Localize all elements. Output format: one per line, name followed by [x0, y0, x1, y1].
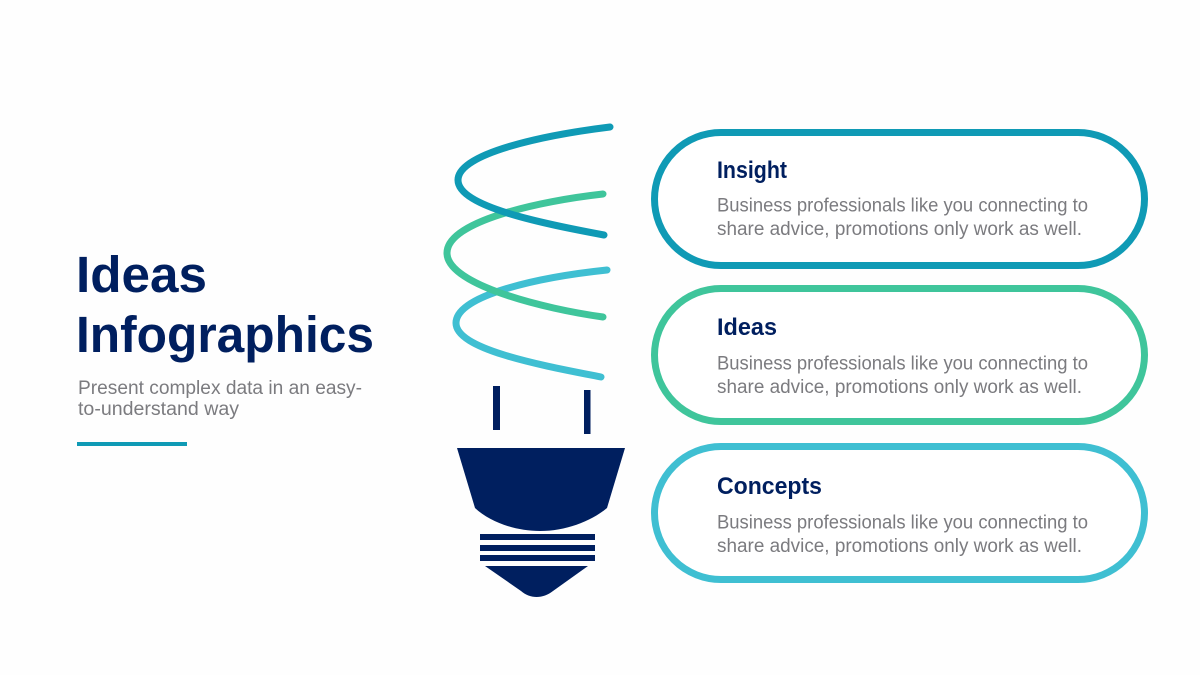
plug body	[457, 448, 625, 531]
subtitle: to-understand way	[78, 399, 240, 420]
pill outline: insight	[654, 132, 1144, 266]
heading: concepts: Concepts	[717, 473, 822, 500]
accent underline	[77, 442, 187, 446]
plug base stripes	[480, 534, 595, 561]
title: Infographics	[76, 306, 374, 363]
pill outline: ideas	[654, 288, 1144, 422]
panel: concepts	[654, 446, 1144, 580]
plug tip	[485, 566, 588, 597]
text block: concepts: Business professionals like you connecting to	[717, 512, 1088, 534]
title: Ideas	[76, 246, 207, 303]
text block: concepts	[717, 512, 1088, 557]
heading: insight: Insight	[717, 157, 787, 184]
icon: light bulb plug	[447, 127, 625, 597]
subtitle	[78, 378, 362, 420]
plug prongs	[493, 386, 590, 434]
spiral coil: teal	[458, 127, 610, 235]
title	[76, 246, 374, 363]
subtitle: Present complex data in an easy-	[78, 378, 362, 399]
panel: ideas	[654, 288, 1144, 422]
heading: ideas: Ideas	[717, 314, 777, 341]
text block: insight: share advice, promotions only work as well.	[717, 219, 1082, 240]
panel: insight	[654, 132, 1144, 266]
text block: ideas: share advice, promotions only work as well.	[717, 377, 1082, 398]
spiral coil: green	[447, 194, 603, 317]
text block: ideas	[717, 354, 1088, 398]
text block: insight: Business professionals like you connecting to	[717, 196, 1088, 216]
pill outline: concepts	[654, 446, 1144, 580]
spiral coil: cyan	[456, 270, 607, 377]
text block: insight	[717, 196, 1088, 240]
text block: concepts: share advice, promotions only work as well.	[717, 536, 1082, 557]
text block: ideas: Business professionals like you connecting to	[717, 354, 1088, 374]
